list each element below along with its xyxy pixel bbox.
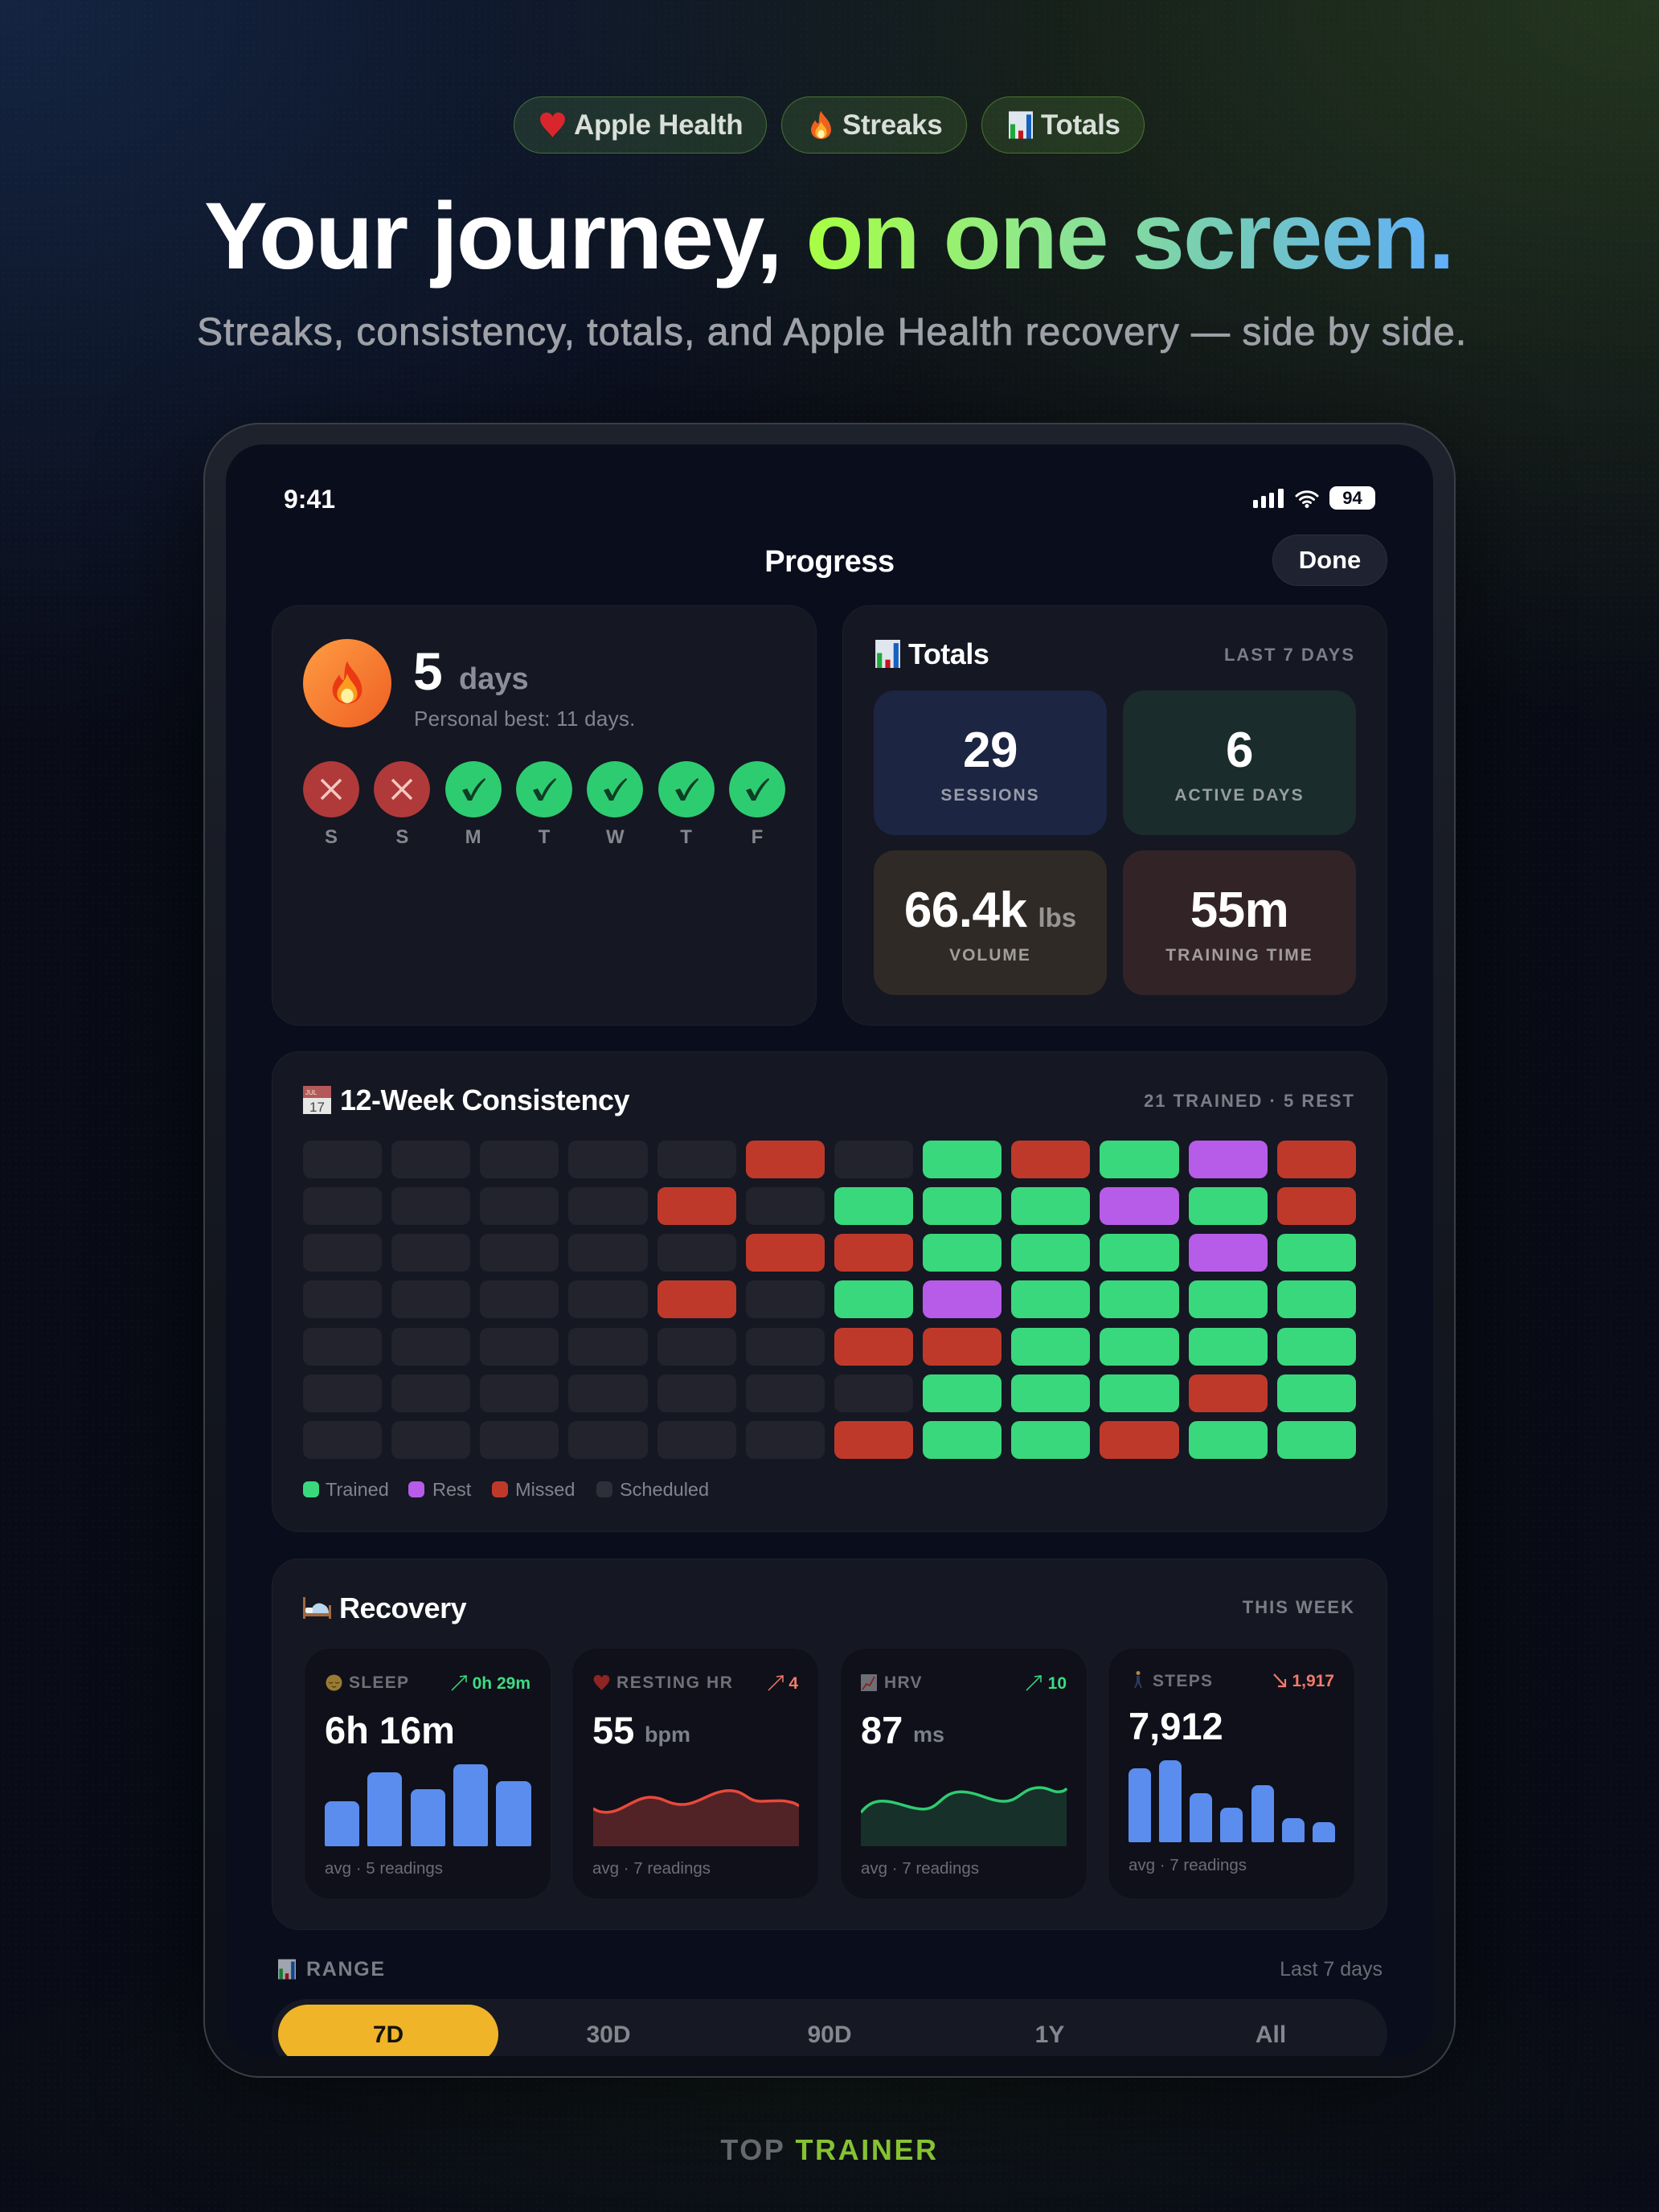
tile: training time: TRAINING TIME [1165, 946, 1313, 965]
trend value: 0h 29m [473, 1674, 530, 1693]
phone frame [203, 423, 1456, 2078]
pill: Streaks: Streaks [842, 109, 942, 141]
brand footer: TOP TRAINER [720, 2133, 939, 2166]
done button [1272, 535, 1387, 586]
tile: active days: ACTIVE DAYS [1174, 786, 1305, 805]
day: trained Thursday [658, 761, 715, 848]
legend: Scheduled [620, 1479, 709, 1500]
range value: Last 7 days [1280, 1958, 1382, 1981]
tile: volume [874, 850, 1107, 995]
segment label: 90D: 90D [807, 2022, 852, 2048]
title: Your journey, on one screen. [204, 183, 1453, 289]
tile: sessions [874, 690, 1107, 835]
icon: calendar [303, 1086, 331, 1114]
trend value: 4 [789, 1674, 798, 1693]
trend arrow [1026, 1675, 1042, 1691]
day: missed Saturday [374, 761, 430, 848]
icon: wifi [1295, 490, 1319, 508]
footnote: avg · 7 readings [861, 1859, 979, 1878]
metric card: sleep [304, 1648, 551, 1899]
week row [303, 761, 785, 848]
icon: heart [593, 1675, 609, 1690]
subtitle: Streaks, consistency, totals, and Apple Health recovery — side by side. [197, 311, 1467, 354]
bar chart: steps [1129, 1760, 1335, 1842]
legend: Trained [326, 1479, 389, 1500]
legend: Rest [432, 1479, 471, 1500]
day: trained Wednesday: W [606, 826, 625, 848]
day: trained Thursday: T [680, 826, 692, 848]
icon: chart increasing [861, 1674, 877, 1691]
icon: bar chart [875, 640, 900, 668]
metric card: steps [1108, 1648, 1355, 1899]
streak count: 5 [413, 641, 443, 701]
tile: training time [1123, 850, 1356, 995]
icon: sleeping face [326, 1675, 342, 1691]
day: trained Friday: F [752, 826, 763, 848]
icon: walking person [1134, 1671, 1142, 1688]
metric label: HRV [884, 1673, 923, 1692]
pill: Apple Health [514, 96, 767, 154]
pill: Streaks [781, 96, 967, 154]
area chart: HRV [861, 1786, 1067, 1846]
day: trained Monday [445, 761, 502, 848]
metric value: 6h 16m [325, 1709, 455, 1751]
tile: active days: 6 [1226, 723, 1253, 778]
legend [303, 1479, 709, 1500]
day: trained Tuesday: T [539, 826, 550, 848]
legend: Missed [515, 1479, 575, 1500]
metric card: HRV [840, 1648, 1088, 1899]
trend arrow [1273, 1673, 1286, 1688]
pill: Totals [981, 96, 1145, 154]
heading: 12-Week Consistency [340, 1083, 629, 1116]
clock: 9:41 [284, 485, 335, 514]
range label: LAST 7 DAYS [1224, 645, 1355, 665]
range label: RANGE [306, 1958, 386, 1981]
day: missed Sunday: S [325, 826, 338, 848]
day: missed Saturday: S [395, 826, 408, 848]
tile: volume: VOLUME [949, 946, 1031, 965]
icon: flame badge [303, 639, 391, 727]
icon: bar chart [278, 1960, 296, 1979]
summary label: 21 TRAINED · 5 REST [1144, 1091, 1355, 1111]
panel: streak [272, 605, 817, 1026]
metric unit: ms [913, 1722, 944, 1747]
tile: volume: 66.4k lbs [904, 883, 1076, 938]
nav title: Progress [764, 545, 895, 579]
status bar [284, 485, 1375, 514]
heading: Recovery [339, 1591, 466, 1624]
panel: totals [842, 605, 1387, 1026]
footnote: avg · 7 readings [1129, 1856, 1247, 1874]
metric label: RESTING HR [616, 1673, 734, 1692]
segment label: 30D: 30D [586, 2022, 631, 2048]
week label: THIS WEEK [1243, 1597, 1355, 1617]
done button: Done [1299, 546, 1361, 574]
icon: bed [303, 1597, 331, 1619]
panel: recovery [272, 1559, 1387, 1930]
range header [278, 1958, 1382, 1981]
personal best: Personal best: 11 days. [414, 707, 636, 731]
pill: Apple Health: Apple Health [574, 109, 743, 141]
segment label: All: All [1256, 2022, 1286, 2048]
trend arrow [452, 1675, 467, 1691]
metric card: resting heart rate [571, 1648, 819, 1899]
metric value: 87 [861, 1709, 903, 1751]
tile: active days [1123, 690, 1356, 835]
battery: 94 [1342, 488, 1362, 508]
footnote: avg · 5 readings [325, 1859, 443, 1878]
metric value: 55 [592, 1709, 634, 1751]
metric value: 7,912 [1129, 1705, 1223, 1747]
metric label: SLEEP [349, 1673, 409, 1692]
bar chart: sleep [325, 1764, 531, 1846]
day: missed Sunday [303, 761, 359, 848]
feature pills [514, 96, 1145, 154]
heatmap grid [303, 1141, 1356, 1459]
selected segment: 7D [278, 2005, 498, 2064]
day: trained Monday: M [465, 826, 481, 848]
day: trained Tuesday [516, 761, 572, 848]
pill: Totals: Totals [1041, 109, 1120, 141]
icon: signal [1253, 489, 1284, 508]
metric label: STEPS [1153, 1672, 1213, 1690]
day: trained Wednesday [587, 761, 643, 848]
icon: calendar: JUL [305, 1089, 317, 1096]
heading: Totals [908, 637, 989, 670]
day: trained Friday [729, 761, 785, 848]
area chart: resting HR [593, 1789, 799, 1846]
segment label: 7D: 7D [373, 2022, 403, 2048]
panel: 12-week consistency [272, 1051, 1387, 1532]
trend value: 1,917 [1292, 1672, 1334, 1690]
tile: training time: 55m [1190, 883, 1288, 938]
tile: sessions: SESSIONS [940, 786, 1040, 805]
streak unit: days [459, 662, 529, 696]
range selector [272, 1999, 1387, 2070]
trend arrow [768, 1675, 784, 1691]
metric unit: bpm [645, 1722, 690, 1747]
tile: sessions: 29 [963, 723, 1018, 778]
trend value: 10 [1048, 1674, 1067, 1693]
battery [1329, 486, 1375, 510]
segment label: 1Y: 1Y [1035, 2022, 1064, 2048]
footnote: avg · 7 readings [592, 1859, 711, 1878]
phone screen [226, 444, 1433, 2056]
